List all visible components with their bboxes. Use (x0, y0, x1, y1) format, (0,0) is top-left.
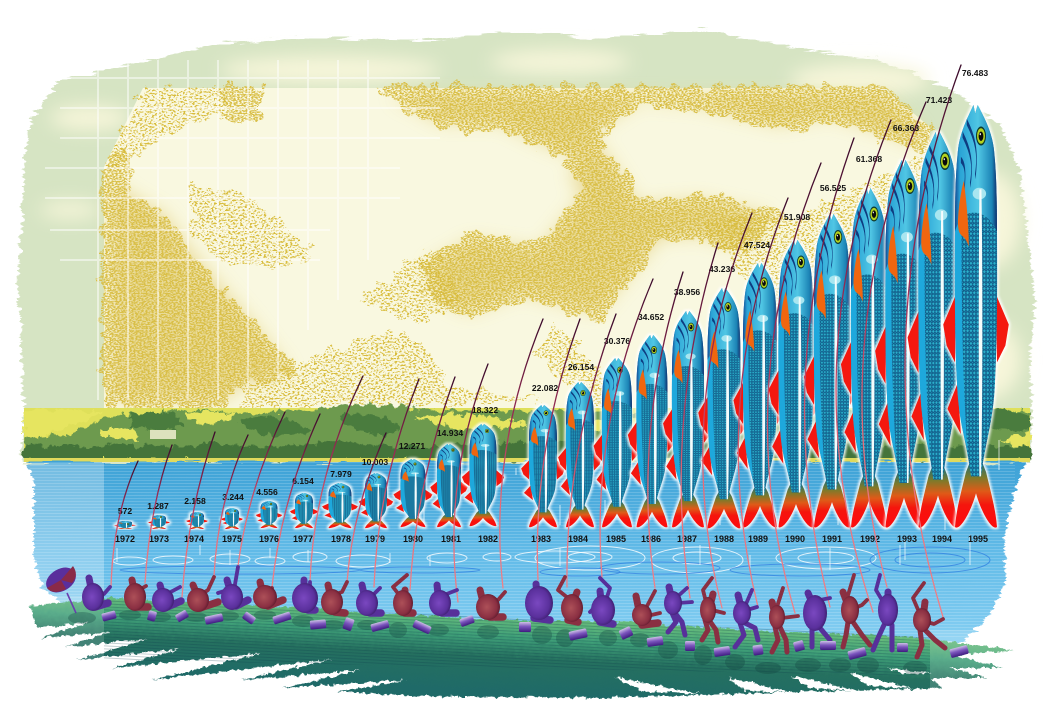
fish 1990 (769, 240, 823, 527)
fisherman 1988 (658, 587, 692, 659)
year labels: 1982 (478, 534, 498, 544)
value labels: 1.287 (147, 501, 169, 511)
year labels: 1973 (149, 534, 169, 544)
value labels: 30.376 (604, 336, 630, 346)
fish 1994 (908, 132, 968, 528)
water surface (26, 462, 1025, 645)
fisherman 1992 (795, 593, 830, 672)
fisherman 1981 (389, 575, 413, 638)
fisherman 1987 (630, 591, 660, 647)
fish 1986 (628, 335, 676, 527)
year labels: 1992 (860, 534, 880, 544)
fishing rods (111, 65, 961, 617)
lighter water margin left (22, 463, 104, 638)
year labels: 1987 (677, 534, 697, 544)
value labels: 4.556 (256, 487, 278, 497)
value labels: 47.524 (744, 240, 770, 250)
fish 1987 (663, 311, 713, 527)
fish 1975 (221, 508, 243, 529)
fisherman 1974 (149, 585, 181, 622)
value labels: 26.154 (568, 362, 594, 372)
fisherman 1990 (725, 590, 758, 670)
value labels: 2.158 (184, 496, 206, 506)
value labels: 7.979 (330, 469, 352, 479)
fish 1980 (394, 459, 432, 527)
fish 1982 (462, 424, 504, 526)
year labels: 1984 (568, 534, 588, 544)
fish 1985 (594, 358, 640, 527)
fisherman 1984 (525, 584, 553, 644)
value labels: 34.652 (638, 312, 664, 322)
fisherman 1978 (292, 580, 318, 627)
year labels: 1991 (822, 534, 842, 544)
lighter ground margins (22, 596, 1020, 692)
icon: beach umbrella (42, 562, 80, 613)
value labels: 22.082 (532, 383, 558, 393)
year labels (115, 534, 988, 544)
grid lines (45, 60, 440, 400)
fish 1979 (359, 473, 393, 528)
fish 1981 (430, 444, 468, 527)
panel: sky (18, 30, 1035, 462)
fisherman 1985 (556, 577, 583, 647)
fish 1972 (114, 521, 136, 529)
gold clouds sparse (104, 88, 930, 412)
year labels: 1993 (897, 534, 917, 544)
fish 1978 (322, 483, 358, 528)
tackle boxes (101, 610, 969, 660)
value labels: 61.368 (856, 154, 882, 164)
gold cloud soft wash (112, 96, 920, 400)
fisherman 1986 (590, 578, 617, 646)
panel: fish chart (114, 105, 1009, 529)
year labels: 1972 (115, 534, 135, 544)
value labels: 43.236 (709, 264, 735, 274)
year labels: 1976 (259, 534, 279, 544)
sky green wash (18, 30, 1035, 462)
year labels: 1994 (932, 534, 952, 544)
fish 1976 (256, 501, 282, 528)
fisherman 1995 (903, 583, 945, 675)
fish 1991 (804, 214, 860, 527)
value labels: 6.154 (292, 476, 314, 486)
sky inner box (104, 88, 930, 408)
year labels: 1988 (714, 534, 734, 544)
landscape: hills and trees (24, 404, 1030, 462)
fisherman 1977 (253, 582, 283, 620)
year labels: 1980 (403, 534, 423, 544)
value labels: 71.423 (926, 95, 952, 105)
value labels: 3.244 (222, 492, 244, 502)
year labels: 1983 (531, 534, 551, 544)
gold clouds dense (102, 86, 932, 410)
year labels: 1977 (293, 534, 313, 544)
fish 1993 (875, 160, 933, 528)
fisherman 1993 (829, 575, 870, 672)
year labels: 1981 (441, 534, 461, 544)
fish 1984 (558, 382, 602, 527)
fisherman 1983 (476, 590, 505, 639)
fisherman 1989 (694, 578, 724, 665)
fisherman 1976 (217, 567, 248, 621)
value labels: 51.908 (784, 212, 810, 222)
fisherman 1979 (321, 582, 347, 630)
panel: ground (22, 596, 1020, 698)
white brush gaps (615, 668, 932, 694)
fish 1977 (290, 493, 318, 528)
value labels: 572 (118, 506, 132, 516)
fisherman 1982 (427, 585, 457, 636)
fisherman 1994 (857, 575, 898, 673)
fisherman 1975 (185, 577, 218, 622)
year labels: 1989 (748, 534, 768, 544)
panel: water (22, 440, 1025, 645)
sky cream patches (40, 50, 1021, 400)
value labels: 66.363 (893, 123, 919, 133)
ripples (113, 440, 999, 576)
fish 1988 (698, 288, 750, 528)
year labels: 1985 (606, 534, 626, 544)
panel: fishermen (68, 567, 945, 675)
fish 1992 (841, 188, 897, 528)
year labels: 1990 (785, 534, 805, 544)
fish 1989 (733, 263, 787, 527)
fish 1973 (148, 515, 170, 529)
fish 1974 (186, 512, 208, 529)
value labels: 14.934 (437, 428, 463, 438)
value labels: 18.322 (472, 405, 498, 415)
fisherman 1972 (68, 578, 110, 624)
fisherman 1991 (755, 588, 798, 674)
fish 1995 (943, 105, 1009, 528)
value labels (118, 68, 988, 516)
year labels: 1979 (365, 534, 385, 544)
year labels: 1995 (968, 534, 988, 544)
value labels: 10.003 (362, 457, 388, 467)
value labels: 76.483 (962, 68, 988, 78)
year labels: 1975 (222, 534, 242, 544)
value labels: 38.956 (674, 287, 700, 297)
value labels: 12.271 (399, 441, 425, 451)
value labels: 56.525 (820, 183, 846, 193)
year labels: 1986 (641, 534, 661, 544)
fisherman 1973 (119, 580, 148, 620)
fisherman 1980 (356, 585, 381, 630)
year labels: 1978 (331, 534, 351, 544)
year labels: 1974 (184, 534, 204, 544)
fish 1983 (521, 405, 565, 527)
